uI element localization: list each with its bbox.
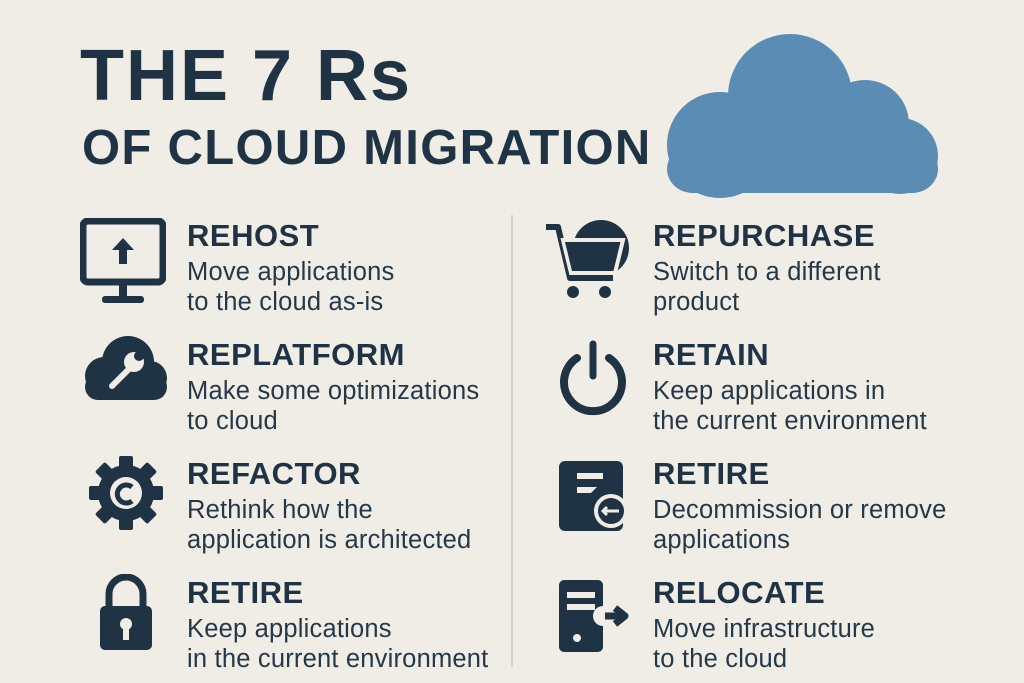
icon: cloud with wrench [85, 336, 167, 400]
icon: lock [100, 574, 152, 650]
item: refactor [89, 456, 471, 554]
icon: server with arrow [559, 580, 628, 652]
heading: RELOCATE [653, 575, 825, 610]
description [653, 496, 946, 554]
heading: REPURCHASE [653, 218, 875, 253]
heading: REHOST [187, 218, 319, 253]
description: application is architected [187, 526, 471, 554]
description: Keep applications in [653, 377, 885, 405]
description: Keep applications [187, 615, 392, 643]
description [187, 377, 479, 435]
title line 1: THE 7 Rs [80, 36, 412, 116]
description [653, 258, 881, 316]
description: in the current environment [187, 645, 488, 673]
title [80, 36, 652, 175]
description: to the cloud as-is [187, 288, 383, 316]
description [187, 496, 471, 554]
item: repurchase [546, 218, 881, 316]
description: to the cloud [653, 645, 787, 673]
item: retain [560, 337, 927, 435]
description [653, 615, 875, 673]
description: Switch to a different [653, 258, 881, 286]
icon: power [560, 340, 626, 416]
description: product [653, 288, 739, 316]
description: Move applications [187, 258, 395, 286]
description: the current environment [653, 407, 927, 435]
title line 2: OF CLOUD MIGRATION [82, 121, 652, 175]
item: replatform [85, 336, 479, 435]
heading: RETIRE [187, 575, 304, 610]
heading: RETIRE [653, 456, 770, 491]
divider [511, 215, 513, 667]
description [653, 377, 927, 435]
icon: monitor [80, 218, 166, 303]
item: relocate [559, 575, 875, 673]
icon: document with minus [559, 461, 624, 531]
description: Decommission or remove [653, 496, 946, 524]
heading: REPLATFORM [187, 337, 405, 372]
icon: cart [546, 220, 629, 298]
description: Rethink how the [187, 496, 373, 524]
description: applications [653, 526, 790, 554]
item: rehost [80, 218, 395, 316]
description [187, 615, 488, 673]
heading: REFACTOR [187, 456, 361, 491]
description: Move infrastructure [653, 615, 875, 643]
description: to cloud [187, 407, 278, 435]
description: Make some optimizations [187, 377, 479, 405]
icon: gear [89, 456, 163, 530]
item: retire (lock) [100, 574, 488, 673]
description [187, 258, 395, 316]
item: retire (document) [559, 456, 946, 554]
heading: RETAIN [653, 337, 769, 372]
